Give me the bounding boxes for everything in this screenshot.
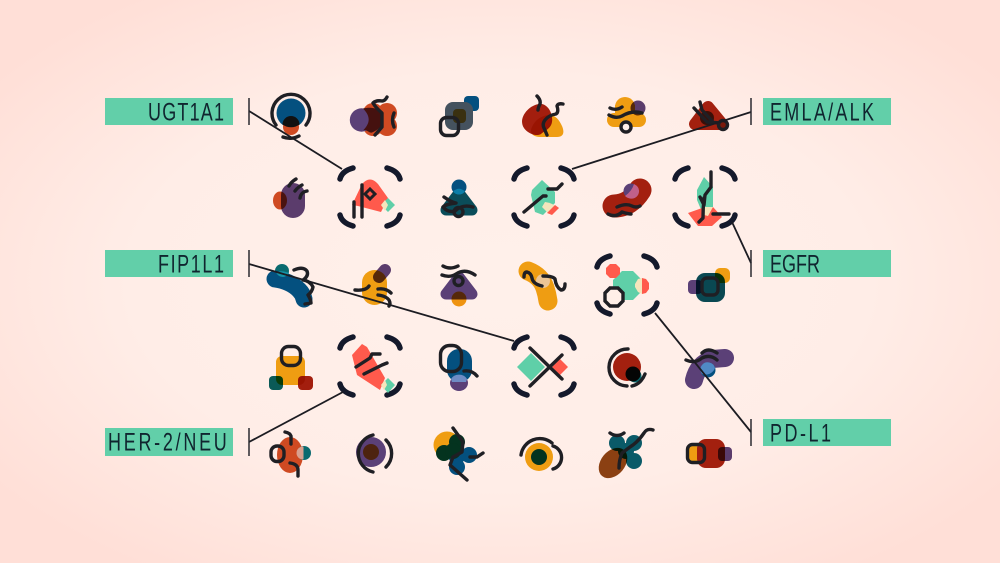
- icon: row 3 column 6 teal squares: [688, 268, 730, 302]
- leader line: HER-2/NEU: [249, 392, 343, 442]
- label: PD-L1: [751, 419, 891, 447]
- label: UGT1A1: UGT1A1: [148, 98, 224, 126]
- label: HER-2/NEU: HER-2/NEU: [108, 428, 227, 456]
- icon: row 2 column 4 bracketed green hexagon: [514, 168, 574, 226]
- icon: row 1 column 2 red clover: [350, 97, 397, 136]
- icon: row 5 column 5 teal clover and brown ellipse: [593, 429, 653, 484]
- label: EGFR: [751, 250, 891, 278]
- leader line: EMLA/ALK: [572, 112, 751, 169]
- icon: row 5 column 6 red square: [688, 439, 732, 468]
- icon: row 4 column 3 blue shape: [440, 346, 477, 391]
- leader line: FIP1L1: [249, 264, 514, 341]
- icon: row 3 column 2 orange shape: [355, 270, 391, 306]
- leader line: UGT1A1: [249, 111, 342, 169]
- icon: row 1 column 6 red triangle: [694, 102, 728, 130]
- icon: row 1 column 4 red and orange blob: [522, 96, 563, 137]
- icon: row 1 column 5 orange cloud: [607, 97, 646, 132]
- icon: row 4 column 6 purple bean: [686, 350, 725, 380]
- label: FIP1L1: FIP1L1: [158, 250, 224, 278]
- icon: row 5 column 2 purple circle: [356, 435, 392, 472]
- icon: row 3 column 4 orange bean: [524, 271, 565, 301]
- icon: row 1 column 3 rounded squares: [440, 96, 479, 136]
- icon: row 2 column 2 bracketed red shape: [340, 168, 400, 226]
- label: EMLA/ALK: EMLA/ALK: [770, 98, 874, 126]
- icon: row 3 column 1 blue bean: [275, 264, 313, 304]
- icon: row 4 column 4 bracketed X diamonds: [514, 337, 574, 395]
- label: PD-L1: PD-L1: [770, 419, 831, 447]
- label: FIP1L1: [105, 250, 249, 278]
- icon: row 4 column 1 orange squares: [269, 346, 313, 390]
- icon: row 2 column 6 bracketed green and red: [675, 168, 735, 226]
- label: EGFR: EGFR: [770, 250, 820, 278]
- icon: row 4 column 5 red circle with ring: [609, 349, 645, 386]
- label: UGT1A1: [105, 98, 249, 126]
- icon: row 2 column 1 purple blob: [273, 179, 307, 218]
- icon: row 3 column 3 purple triangle: [442, 266, 475, 306]
- leader line: PD-L1: [655, 313, 751, 432]
- icon: row 3 column 5 bracketed octagons: [597, 256, 657, 314]
- icon: row 1 column 1 blue circle: [272, 94, 310, 138]
- icon: row 5 column 4 orange circle with arcs: [521, 439, 562, 471]
- icon: row 5 column 3 orange and blue clover: [434, 428, 483, 480]
- icon: row 5 column 1 red ellipse: [271, 432, 311, 476]
- icon: row 4 column 2 bracketed red shape: [340, 337, 400, 395]
- icon: row 2 column 3 teal triangle: [443, 180, 473, 216]
- icon: row 2 column 5 red bean with purple circle: [608, 184, 640, 216]
- leader line: EGFR: [732, 222, 751, 263]
